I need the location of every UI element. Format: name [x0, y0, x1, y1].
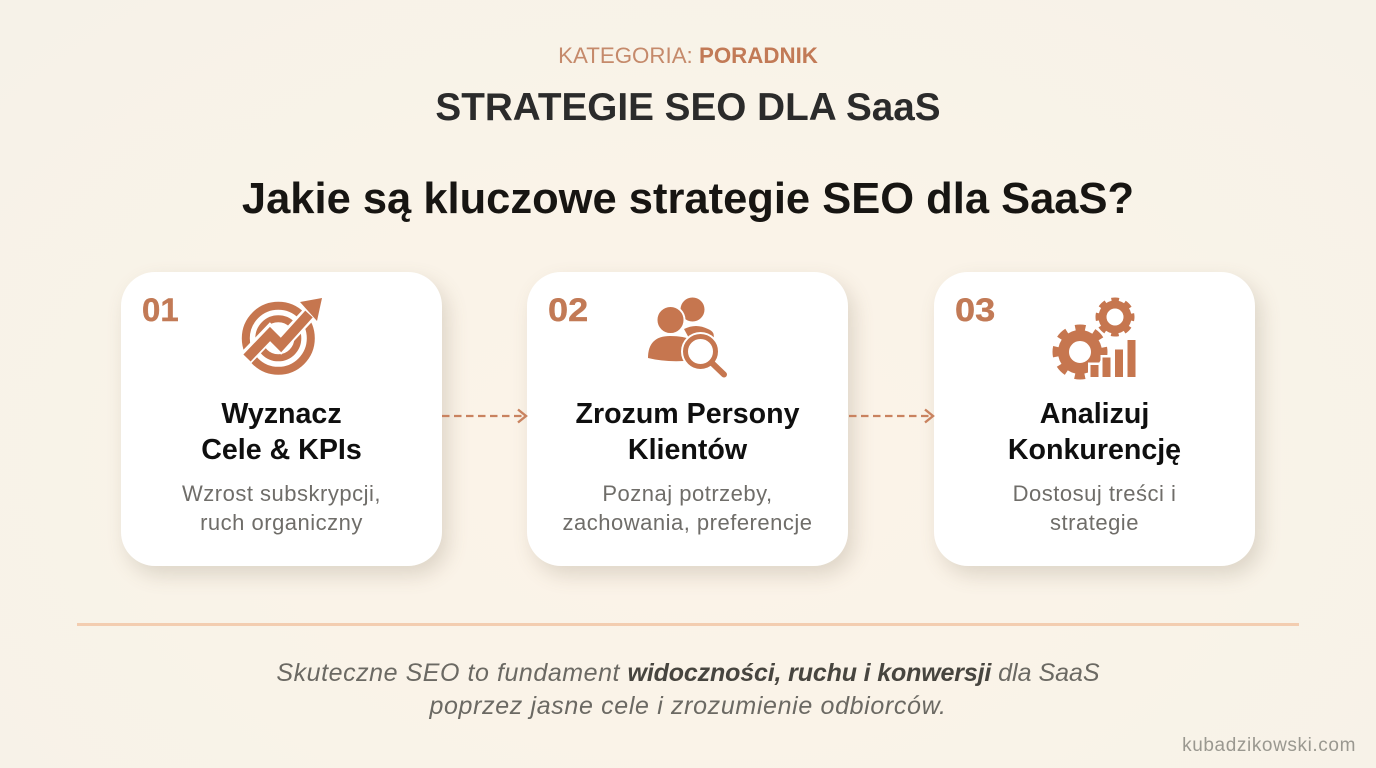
- step 2 description: [562, 481, 812, 535]
- arrow: step 2 to step 3: [849, 410, 933, 422]
- step 3 description: [1013, 481, 1176, 535]
- step 3 description: Dostosuj treści i: [1013, 481, 1176, 506]
- step 3 heading: Konkurencję: [1008, 434, 1181, 466]
- title: STRATEGIE SEO DLA SaaS: [435, 86, 941, 129]
- step number 03: 03: [955, 292, 995, 328]
- icon: gears and bar chart: [1056, 300, 1136, 380]
- icon: target with rising arrow: [245, 298, 322, 371]
- step 2 description: Poznaj potrzeby,: [602, 481, 773, 506]
- website credit: kubadzikowski.com: [1182, 735, 1356, 756]
- panel: step 1: [121, 272, 442, 566]
- step number 01: 01: [142, 292, 179, 328]
- summary text: Skuteczne SEO to fundament widoczności, ruchu i konwersji dla SaaS: [276, 659, 1100, 687]
- step 3 heading: [1008, 398, 1181, 466]
- summary text: poprzez jasne cele i zrozumienie odbiorców.: [429, 692, 947, 720]
- icon: personas with magnifier: [648, 298, 724, 374]
- step 3 heading: Analizuj: [1040, 398, 1149, 430]
- step number 02: 02: [548, 292, 588, 328]
- step 2 heading: [575, 398, 800, 466]
- step 1 heading: Cele & KPIs: [201, 434, 362, 466]
- arrow: step 1 to step 2: [442, 410, 526, 422]
- step 2 description: zachowania, preferencje: [562, 510, 812, 535]
- panel: step 3: [934, 272, 1255, 566]
- step 3 description: strategie: [1050, 510, 1139, 535]
- main question heading: Jakie są kluczowe strategie SEO dla SaaS?: [242, 175, 1134, 223]
- step 1 description: [182, 481, 381, 535]
- step 2 heading: Zrozum Persony: [575, 398, 800, 430]
- category label: KATEGORIA: PORADNIK: [558, 43, 818, 68]
- summary text: [276, 659, 1100, 720]
- step 1 description: ruch organiczny: [200, 510, 363, 535]
- step 2 heading: Klientów: [628, 434, 747, 466]
- panel: step 2: [527, 272, 848, 566]
- step 1 description: Wzrost subskrypcji,: [182, 481, 381, 506]
- step 1 heading: [201, 398, 362, 466]
- step 1 heading: Wyznacz: [221, 398, 342, 430]
